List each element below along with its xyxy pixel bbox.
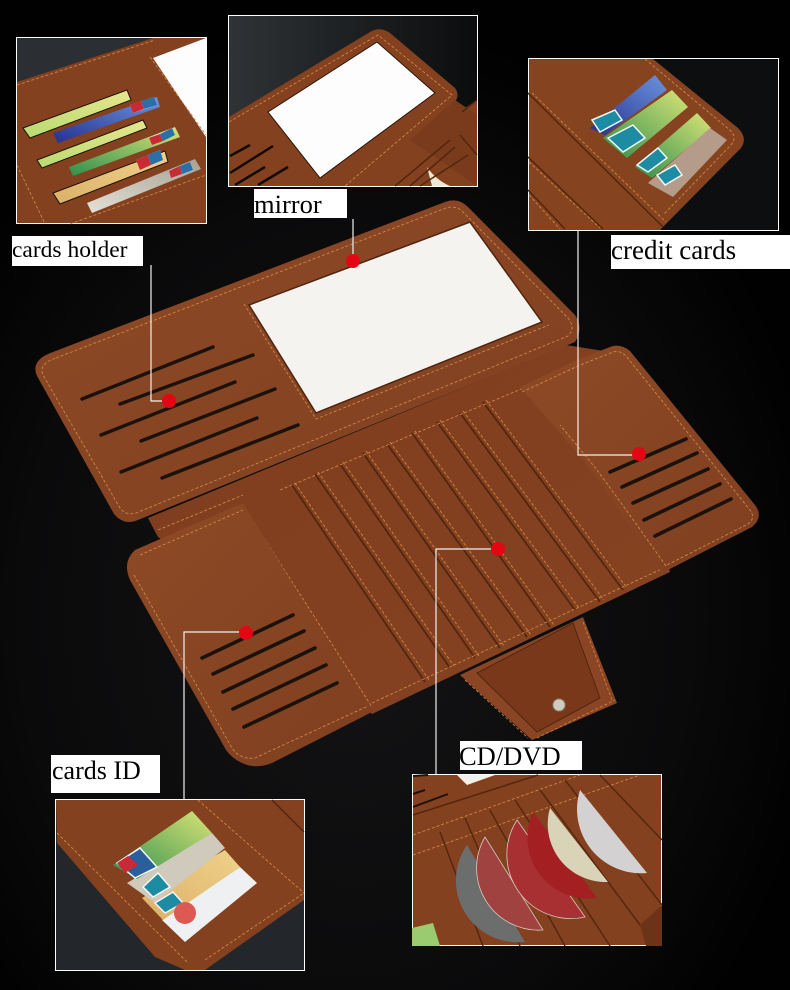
label: mirror: mirror	[254, 189, 322, 219]
inset: credit cards	[528, 58, 778, 230]
card slots	[158, 377, 668, 707]
right flap	[520, 346, 759, 573]
inset: CD/DVD	[412, 774, 662, 946]
label: cards holder: cards holder	[12, 237, 128, 263]
wallet middle panel	[148, 345, 670, 714]
left flap	[127, 503, 372, 766]
inset: mirror	[228, 16, 478, 186]
mirror	[249, 222, 542, 413]
label: cards ID: cards ID	[52, 756, 141, 785]
inset: cards ID	[56, 800, 304, 970]
label: credit cards: credit cards	[611, 235, 736, 265]
snap tab	[460, 617, 617, 740]
callout lines and markers	[151, 219, 646, 799]
label: credit cards	[611, 235, 790, 269]
label: CD/DVD: CD/DVD	[459, 741, 561, 771]
label: cards ID	[51, 755, 160, 793]
inset: cards holder	[16, 38, 206, 224]
top mirror flap	[35, 200, 580, 522]
wallet	[35, 200, 759, 766]
